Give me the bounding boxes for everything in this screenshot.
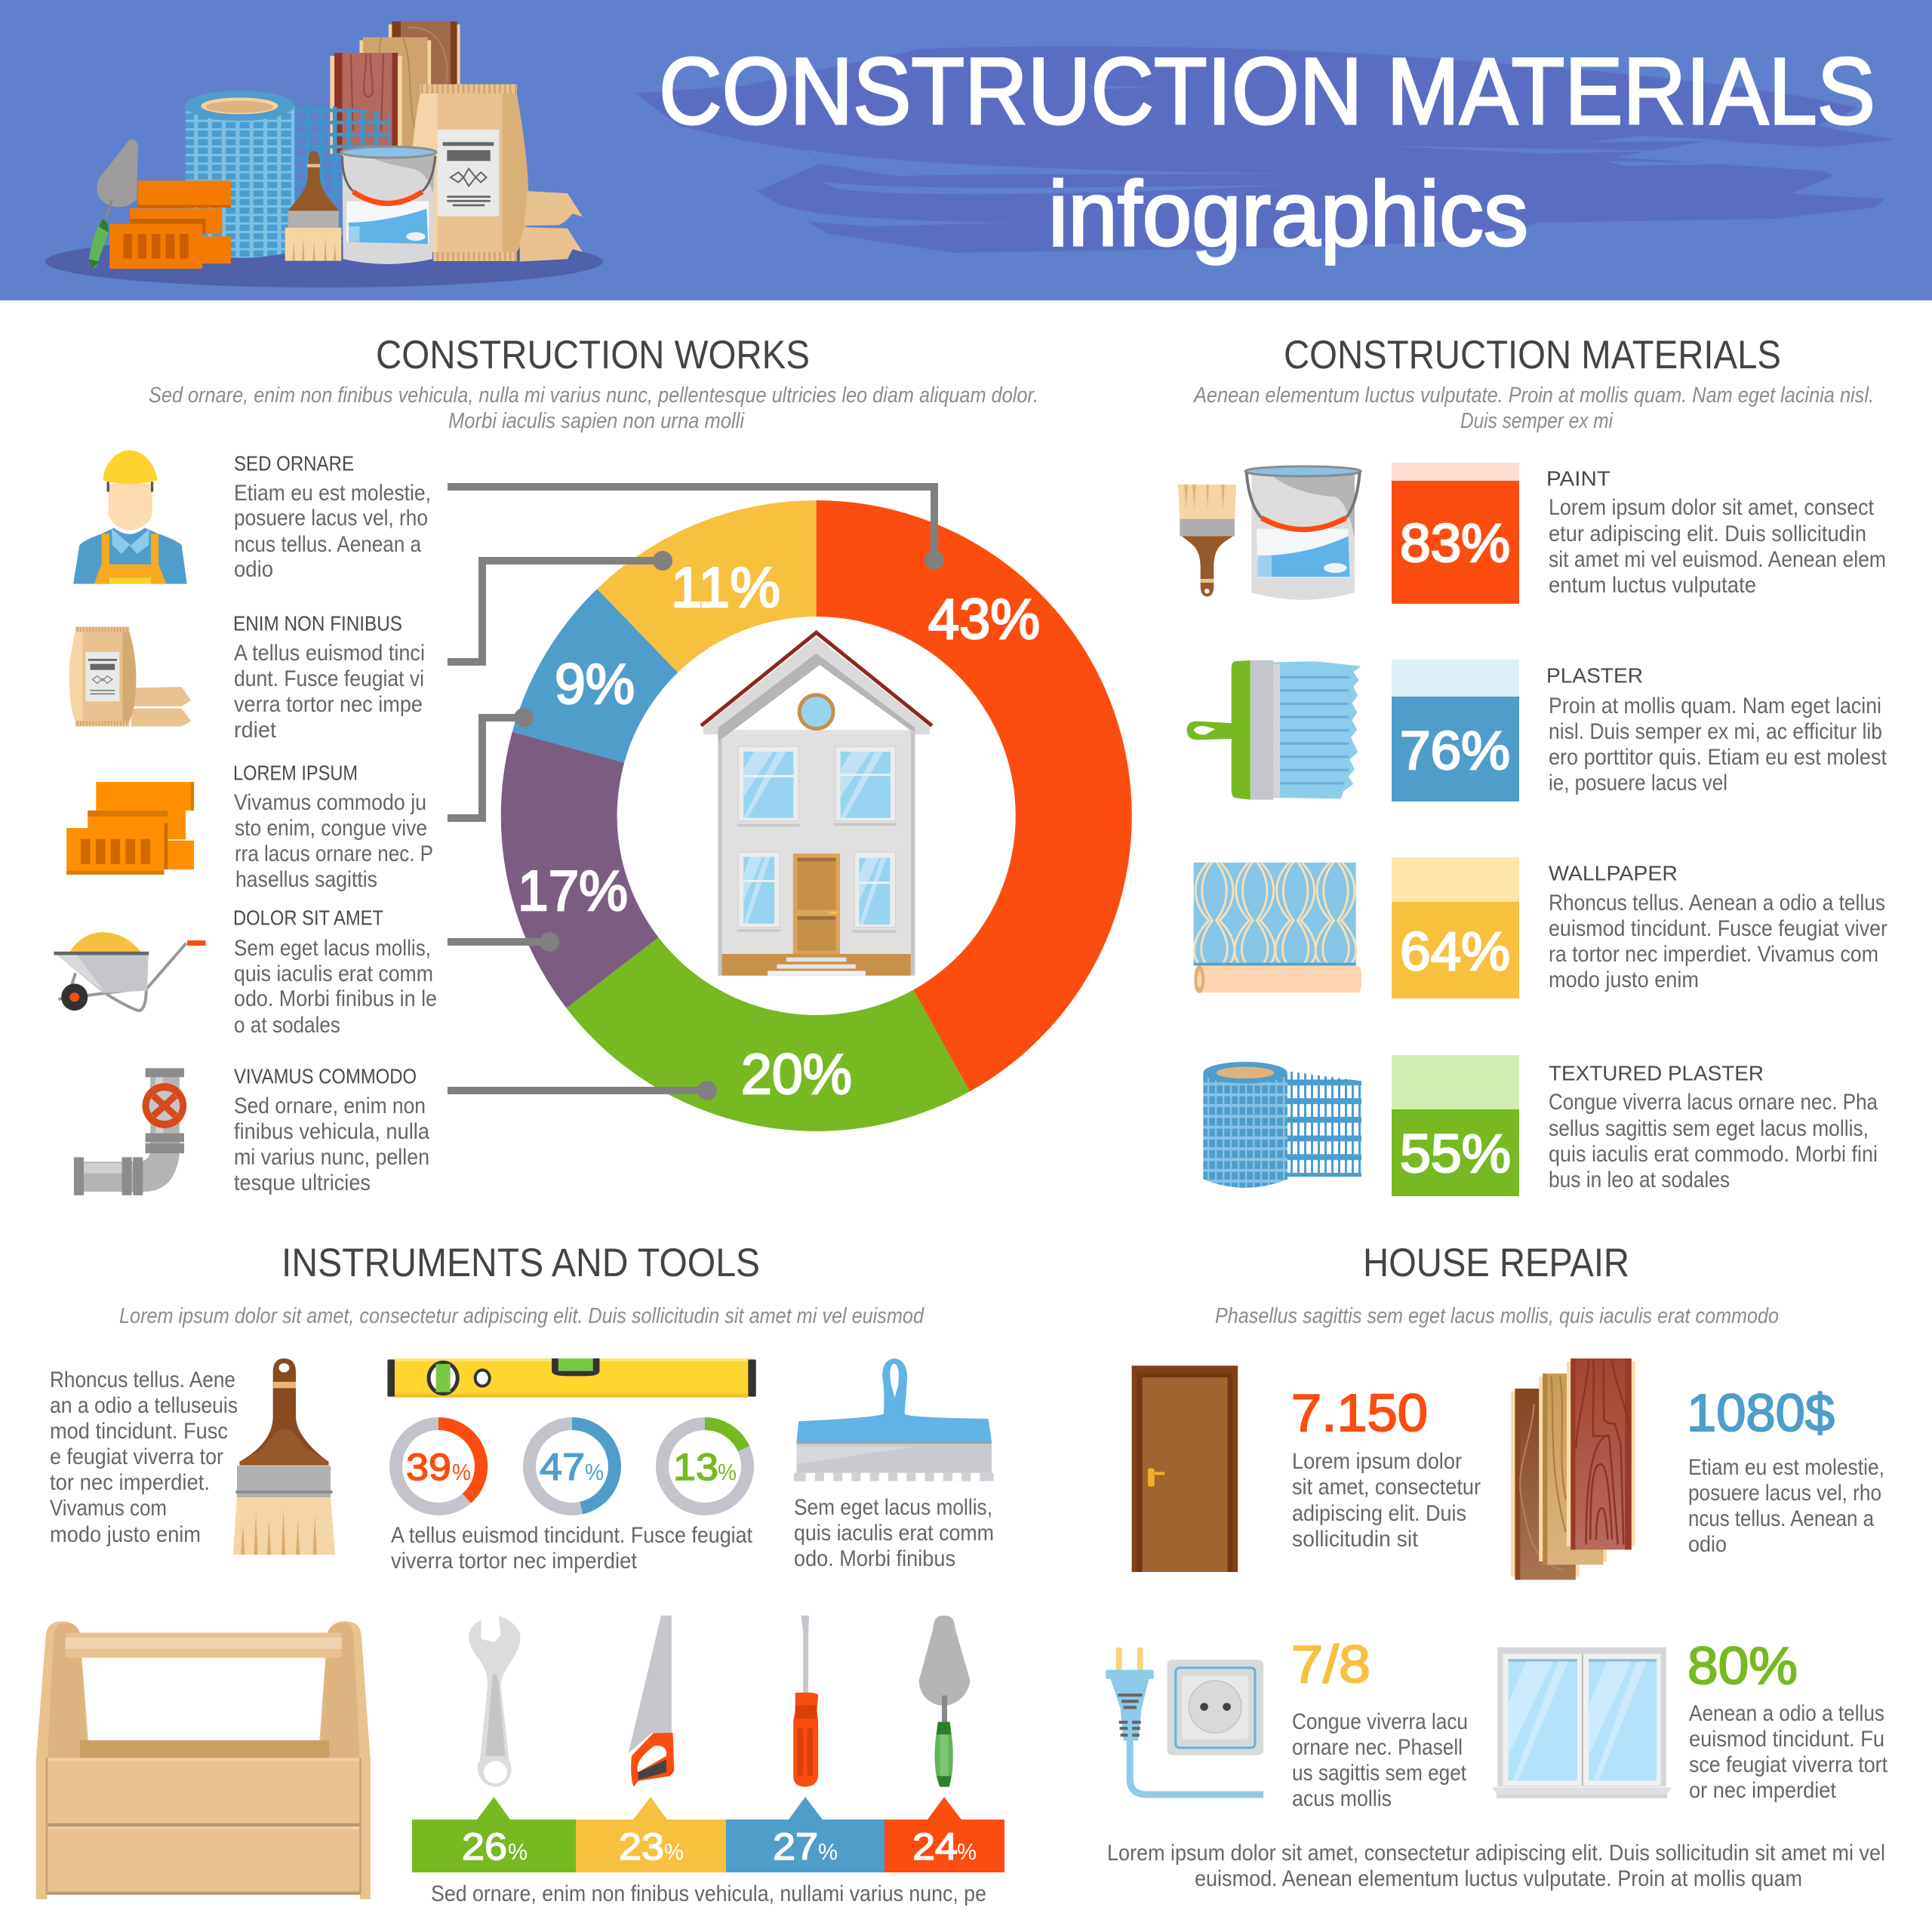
intro: construction materials: Duis semper ex mi (1460, 409, 1614, 433)
intro: house repair: Phasellus sagittis sem eget lacus mollis, quis iaculis erat commodo (1215, 1304, 1779, 1328)
paint brush (285, 151, 341, 261)
text: plaster: Proin at mollis quam. Nam eget lacini (1549, 694, 1881, 718)
text: closing paragraph: euismod. Aenean elementum luctus vulputate. Proin at mollis quam (1195, 1866, 1802, 1891)
text: lorem ipsum: sto enim, congue vive (235, 816, 427, 841)
text: 7.150 description: sollicitudin sit (1292, 1527, 1419, 1552)
upper windows (737, 746, 897, 826)
segment: 24% orange: % (957, 1838, 977, 1865)
icon: bricks (66, 782, 194, 875)
connector: dolor sit amet to 17% (448, 932, 559, 952)
text: vivamus commodo: mi varius nunc, pellen (234, 1145, 429, 1170)
text: 80% description (1689, 1701, 1888, 1803)
text: textured plaster (1549, 1061, 1878, 1192)
text: 7/8 description (1292, 1709, 1468, 1811)
text: wallpaper (1549, 862, 1887, 992)
label 11%: 11% (671, 555, 780, 619)
text: paint: sit amet mi vel euismod. Aenean elem (1549, 547, 1886, 572)
header banner (0, 0, 1932, 300)
text: 80% description: sce feugiat viverra tort (1689, 1752, 1888, 1777)
text: paint: Lorem ipsum dolor sit amet, consect (1549, 495, 1875, 520)
segment: 9% blue (512, 589, 678, 763)
text: sed ornare: odio (234, 557, 273, 582)
icon: window (1492, 1647, 1672, 1798)
segment: 24% orange (884, 1797, 1004, 1872)
text: 1080$ description: Etiam eu est molestie, (1688, 1455, 1884, 1480)
stat bar: textured plaster 55% (1392, 1055, 1519, 1196)
text: dolor sit amet: Sem eget lacus mollis, (234, 936, 431, 961)
text: dolor sit amet: DOLOR SIT AMET (233, 906, 383, 930)
text: paint: entum luctus vulputate (1549, 573, 1756, 598)
text: textured plaster: Congue viverra lacus ornare nec. Pha (1549, 1090, 1878, 1115)
text: dolor sit amet: o at sodales (234, 1013, 340, 1038)
text: 1080$ description: ncus tellus. Aenean a (1688, 1506, 1874, 1531)
segment: 26% green (412, 1797, 576, 1872)
text: wallpaper: WALLPAPER (1549, 862, 1678, 884)
icon: brush and paint can (1178, 466, 1361, 600)
intro: construction works (149, 383, 1038, 433)
text: rhoncus tellus: tor nec imperdiet. (50, 1470, 210, 1495)
label 17%: 17% (518, 859, 628, 922)
heading: house repair: HOUSE REPAIR (1363, 1241, 1629, 1285)
text: dolor sit amet (233, 906, 437, 1038)
text: vivamus commodo: VIVAMUS COMMODO (234, 1064, 417, 1088)
text: spatula caption: odo. Morbi finibus (794, 1546, 955, 1571)
label 43%: 43% (928, 587, 1040, 651)
segment: 27% blue: 27 (773, 1826, 818, 1868)
text: lorem ipsum (233, 761, 433, 892)
text: closing paragraph (1107, 1841, 1885, 1891)
text: textured plaster: sellus sagittis sem eget lacus mollis, (1549, 1116, 1869, 1141)
paint brush stroke behind title (635, 46, 1896, 253)
text: lorem ipsum: rra lacus ornare nec. P (235, 841, 433, 866)
donut gauge: 39%: % (452, 1459, 471, 1485)
heading: construction materials: CONSTRUCTION MATERIALS (1284, 333, 1781, 377)
connector: vivamus commodo to 20% (448, 1081, 717, 1100)
icon: cement sacks (69, 627, 191, 727)
donut gauge: 47% (530, 1423, 614, 1509)
donut gauge: 39%: 39 (406, 1446, 451, 1488)
segment: 24% orange: 24 (912, 1826, 958, 1868)
icon: hand saw (629, 1616, 674, 1787)
text: paint: etur adipiscing elit. Duis sollicitudin (1549, 521, 1866, 546)
donut gauge: 47%: % (585, 1459, 604, 1485)
text: gauge caption: viverra tortor nec imperdiet (391, 1549, 638, 1574)
text: gauge caption: A tellus euismod tincidunt. Fusce feugiat (391, 1523, 753, 1548)
text: paint (1546, 466, 1886, 598)
label 9%: 9% (555, 652, 635, 715)
stat bar: paint 83%: 83% (1400, 514, 1510, 574)
text: 7.150 description: sit amet, consectetur (1292, 1475, 1481, 1500)
text: lorem ipsum: Vivamus commodo ju (234, 790, 426, 815)
donut chart (501, 500, 1132, 1131)
text: enim non finibus (233, 611, 425, 743)
text: 1080$ description (1688, 1455, 1884, 1557)
text: enim non finibus: verra tortor nec impe (234, 692, 423, 717)
icon: fiberglass mesh roll (1203, 1062, 1361, 1188)
text: textured plaster: TEXTURED PLASTER (1549, 1061, 1764, 1085)
stat: 80%: 80% (1687, 1636, 1798, 1695)
intro: construction works: Sed ornare, enim non finibus vehicula, nulla mi varius nunc, pellentesque ultricies leo diam aliquam dolor. (149, 383, 1038, 408)
text: rhoncus tellus: modo justo enim (50, 1522, 201, 1547)
text: plaster: PLASTER (1546, 664, 1643, 687)
connector: sed ornare to 43% (448, 487, 944, 570)
icon: door (1132, 1366, 1238, 1572)
text: 80% description: Aenean a odio a tellus (1689, 1701, 1884, 1726)
text: 7.150 description: Lorem ipsum dolor (1292, 1449, 1462, 1474)
stat bar: plaster 76%: 76% (1400, 721, 1510, 781)
heading: construction works: CONSTRUCTION WORKS (376, 333, 810, 377)
text: vivamus commodo: Sed ornare, enim non (234, 1094, 426, 1118)
text: wallpaper: ra tortor nec imperdiet. Vivamus com (1549, 942, 1878, 967)
icon: notched spatula (794, 1358, 994, 1481)
text: sed ornare: Etiam eu est molestie, (234, 481, 431, 506)
text: rhoncus tellus: Vivamus com (50, 1496, 167, 1521)
text: spatula caption: quis iaculis erat comm (794, 1521, 994, 1546)
icon: pipe with valve (74, 1068, 186, 1195)
text: paint: PAINT (1546, 466, 1611, 491)
text: rhoncus tellus: mod tincidunt. Fusc (50, 1419, 228, 1444)
text: plaster: ero porttitor quis. Etiam eu est molest (1549, 745, 1887, 770)
text: dolor sit amet: quis iaculis erat comm (234, 961, 433, 986)
stacked bar: tool shares (412, 1797, 1004, 1872)
segment: 26% green: % (508, 1838, 528, 1865)
lower windows (737, 852, 896, 933)
segment: 26% green: 26 (462, 1826, 507, 1868)
icon: plaster brush (1187, 660, 1361, 800)
small sacks (520, 191, 583, 262)
segment: 27% blue (726, 1797, 884, 1872)
text: wallpaper: Rhoncus tellus. Aenean a odio a tellus (1549, 891, 1885, 915)
icon: screwdriver (793, 1616, 818, 1787)
door (793, 854, 840, 954)
text: 7/8 description: us sagittis sem eget (1292, 1761, 1467, 1786)
segment: 23% yellow: % (664, 1838, 684, 1865)
text: sed ornare: SED ORNARE (234, 451, 354, 475)
stat bar: wallpaper 64%: 64% (1400, 922, 1510, 982)
segment: 43% orange (817, 500, 1132, 1091)
icon: spirit level (387, 1358, 756, 1398)
stat bar: wallpaper 64% (1392, 857, 1519, 998)
donut gauge: 47%: 47 (540, 1446, 585, 1488)
text: enim non finibus: dunt. Fusce feugiat vi (234, 666, 424, 691)
trowel (89, 139, 138, 269)
hero illustration: pile of construction materials (45, 21, 603, 288)
segment: 11% yellow (597, 500, 817, 672)
text: spatula caption (794, 1495, 994, 1571)
text: vivamus commodo: tesque ultricies (234, 1171, 371, 1195)
icon: plug and socket (1106, 1647, 1263, 1795)
icon: house (701, 632, 932, 976)
text: plaster: nisl. Duis semper ex mi, ac efficitur lib (1549, 719, 1882, 744)
donut gauge: 13%: 13 (673, 1446, 718, 1488)
icon: wooden toolbox (36, 1621, 371, 1900)
text: 7.150 description: adipiscing elit. Duis (1292, 1501, 1466, 1526)
text: 7.150 description (1292, 1449, 1481, 1552)
text: 7/8 description: Congue viverra lacu (1292, 1709, 1468, 1734)
intro: construction works: Morbi iaculis sapien non urna molli (448, 409, 745, 433)
segment: 23% yellow: 23 (619, 1826, 664, 1868)
stat bar: paint 83% (1392, 463, 1519, 604)
mesh roll (185, 91, 392, 258)
bricks (109, 180, 231, 269)
segment: 23% yellow (576, 1797, 726, 1872)
text: rhoncus tellus: an a odio a telluseuis (50, 1393, 238, 1418)
icon: wallpaper roll (1194, 863, 1361, 993)
connector lines (448, 487, 944, 1100)
wood planks (330, 21, 460, 154)
donut gauge: 39% (395, 1423, 481, 1509)
cement bag (411, 85, 528, 261)
paint bucket (341, 146, 436, 264)
connector: lorem ipsum to 9% (448, 708, 534, 818)
text: sed ornare: posuere lacus vel, rho (234, 506, 428, 531)
text: rhoncus tellus: Rhoncus tellus. Aene (50, 1367, 235, 1392)
text: spatula caption: Sem eget lacus mollis, (794, 1495, 992, 1520)
text: lorem ipsum: LOREM IPSUM (233, 761, 358, 785)
text: sed ornare: ncus tellus. Aenean a (234, 532, 421, 557)
stat: 7/8: 7/8 (1291, 1635, 1371, 1694)
stat bar: textured plaster 55%: 55% (1400, 1124, 1511, 1184)
text: lorem ipsum: hasellus sagittis (235, 867, 377, 892)
text: wallpaper: euismod tincidunt. Fusce feugiat viver (1549, 916, 1887, 941)
text: rhoncus tellus (50, 1367, 238, 1547)
text: 1080$ description: posuere lacus vel, rho (1688, 1481, 1881, 1506)
text: vivamus commodo (234, 1064, 429, 1195)
icon: wood planks (1511, 1358, 1635, 1580)
segment: 27% blue: % (818, 1838, 838, 1865)
text: 80% description: euismod tincidunt. Fu (1689, 1727, 1884, 1752)
text: 1080$ description: odio (1688, 1532, 1727, 1557)
text: 80% description: or nec imperdiet (1689, 1778, 1837, 1803)
text: vivamus commodo: finibus vehicula, nulla (234, 1119, 429, 1144)
heading: instruments and tools: INSTRUMENTS AND TOOLS (281, 1241, 760, 1285)
segment: 17% purple (501, 732, 658, 1008)
text: enim non finibus: A tellus euismod tinci (234, 641, 425, 666)
text: plaster (1546, 664, 1887, 795)
text: textured plaster: quis iaculis erat commodo. Morbi fini (1549, 1142, 1878, 1167)
text: gauge caption (391, 1523, 753, 1574)
icon: large paint brush (233, 1358, 335, 1555)
donut gauge: 13% (663, 1423, 747, 1509)
icon: pointing trowel (919, 1616, 970, 1787)
intro: construction materials (1192, 383, 1874, 433)
text: rhoncus tellus: e feugiat viverra tor (50, 1444, 223, 1469)
foundation and steps (722, 954, 911, 976)
text: dolor sit amet: odo. Morbi finibus in le (234, 986, 437, 1011)
donut gauge: 13%: % (718, 1459, 737, 1485)
label 20%: 20% (741, 1042, 852, 1106)
segment: 20% green (566, 937, 970, 1131)
subtitle: infographics (1048, 162, 1528, 265)
text: enim non finibus: ENIM NON FINIBUS (233, 611, 402, 635)
connector: enim non finibus to 11% (448, 551, 672, 662)
stat: 1080$: 1080$ (1687, 1383, 1835, 1442)
text: bar caption: Sed ornare, enim non finibus vehicula, nullami varius nunc, pe (431, 1881, 986, 1906)
icon: wrench (469, 1616, 521, 1787)
ground shadow (45, 235, 603, 288)
text: 7/8 description: acus mollis (1292, 1786, 1392, 1811)
text: plaster: ie, posuere lacus vel (1549, 771, 1727, 795)
icon: worker (73, 451, 187, 584)
text: wallpaper: modo justo enim (1549, 968, 1699, 992)
text: enim non finibus: rdiet (234, 718, 277, 743)
text: sed ornare (234, 451, 431, 582)
text: 7/8 description: ornare nec. Phasell (1292, 1735, 1463, 1760)
intro: instruments and tools: Lorem ipsum dolor sit amet, consectetur adipiscing elit. Duis sollicitudin sit amet mi vel euismod (119, 1304, 924, 1328)
text: textured plaster: bus in leo at sodales (1549, 1168, 1730, 1192)
stat: 7.150: 7.150 (1291, 1383, 1428, 1442)
stat bar: plaster 76% (1392, 660, 1519, 801)
icon: wheelbarrow (54, 932, 206, 1011)
